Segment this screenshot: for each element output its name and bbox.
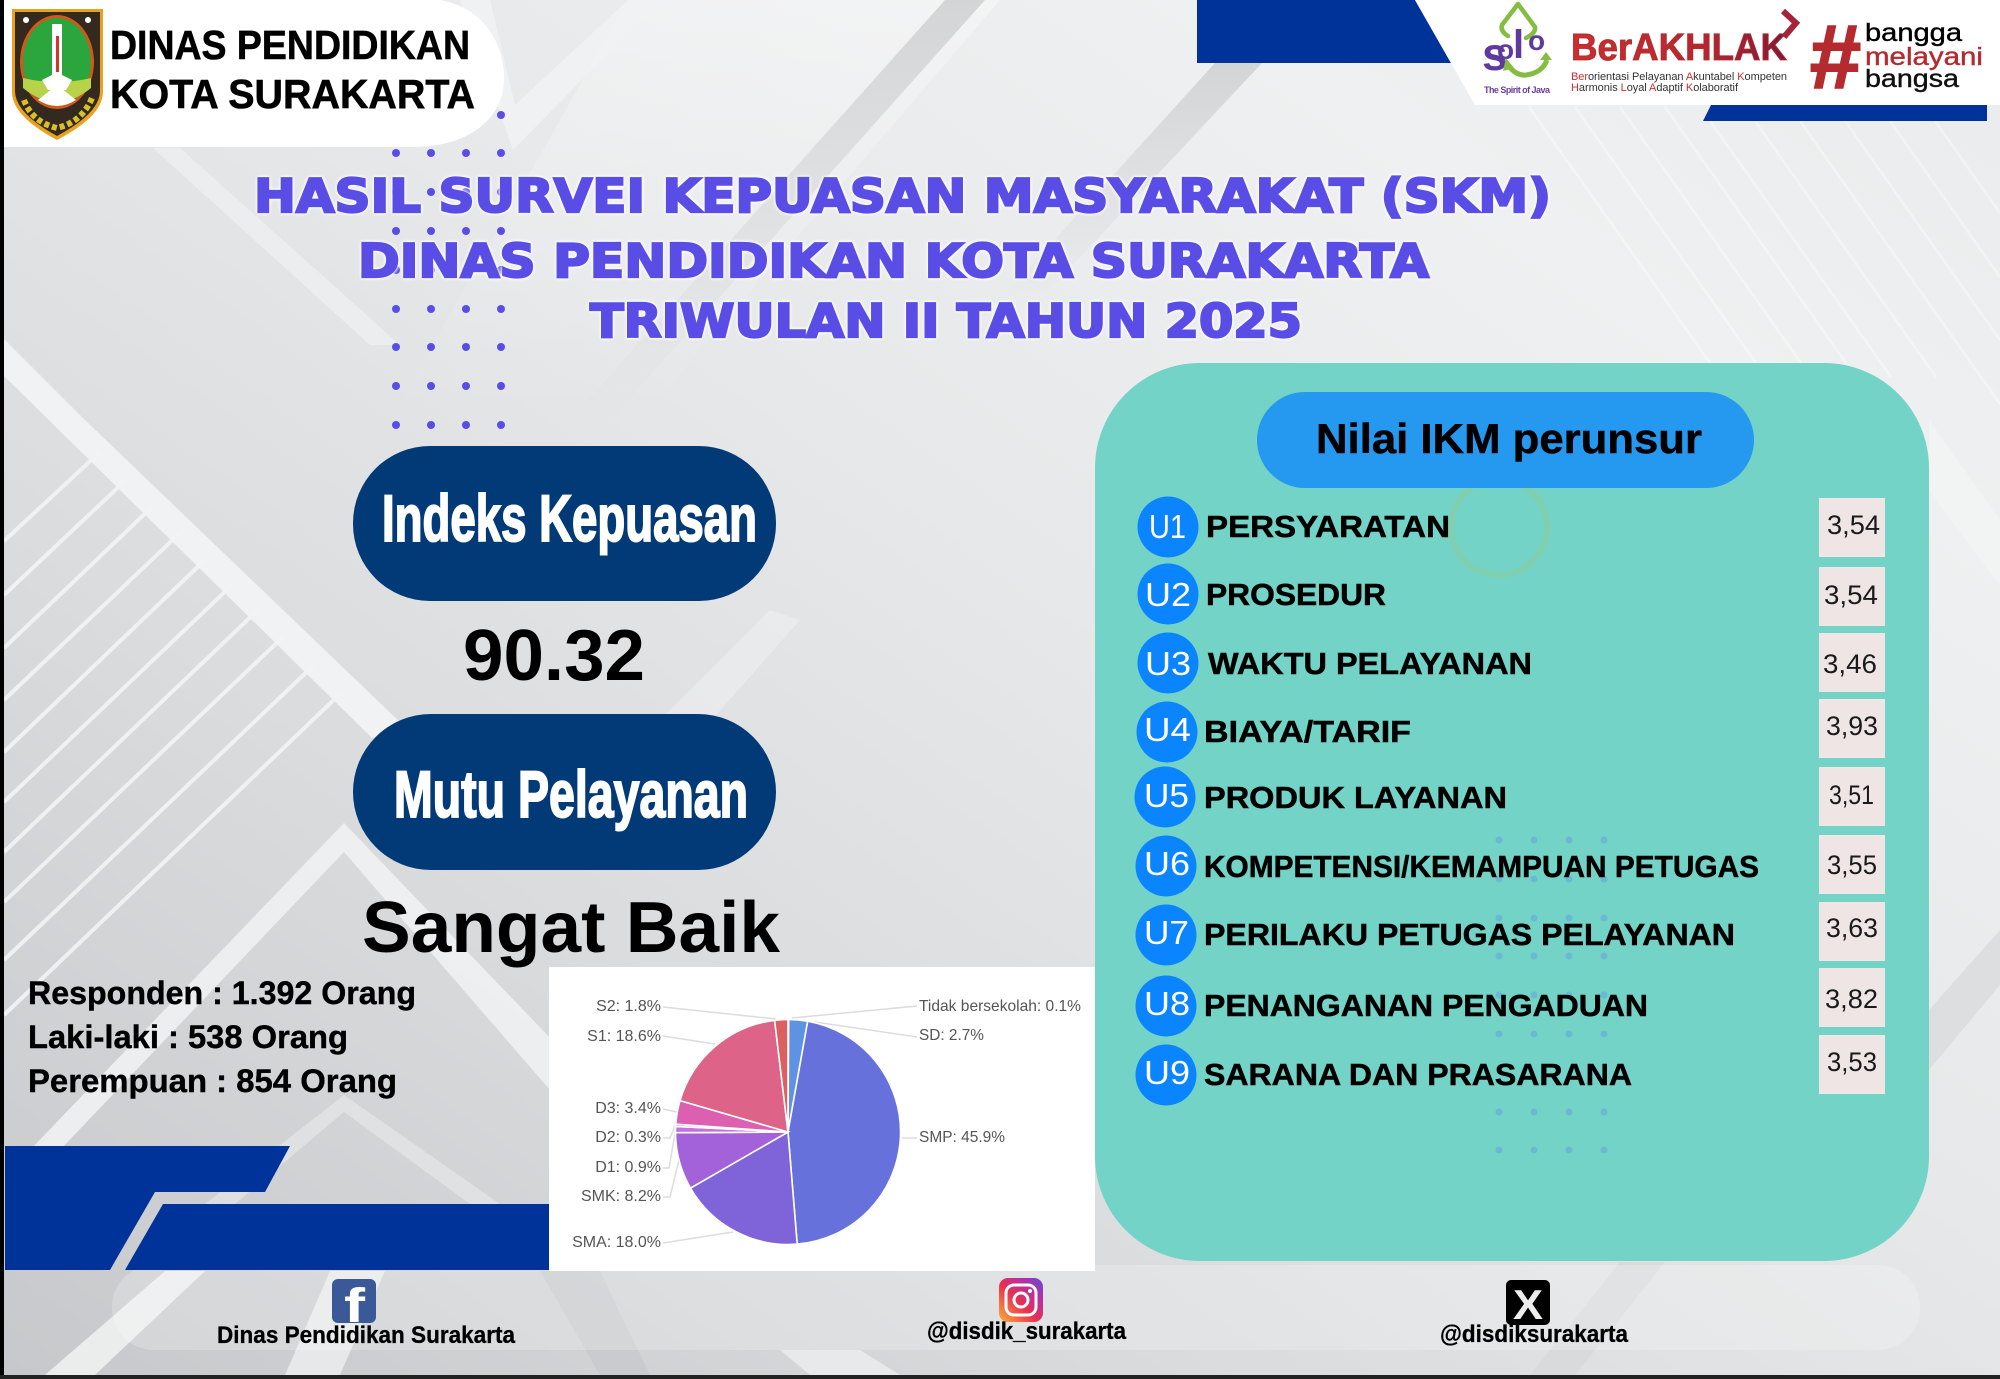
logo: bangga melayani bangsa <box>1810 8 1983 108</box>
row U3: WAKTU PELAYANAN <box>1208 646 1532 681</box>
header: partner logo banner <box>1415 0 2000 108</box>
pie labels: S1: 18.6% <box>587 1028 661 1045</box>
row U8: U8 <box>1144 985 1190 1022</box>
row U3 <box>1138 632 1885 694</box>
row U2 <box>1138 564 1885 626</box>
row U8: PENANGANAN PENGADUAN <box>1204 988 1648 1023</box>
pill: Mutu Pelayanan <box>353 714 776 870</box>
row U3: 3,46 <box>1823 649 1877 679</box>
row U4: U4 <box>1144 711 1191 748</box>
logo: BerAKHLAK: Harmonis Loyal Adaptif Kolaboratif <box>1571 82 1739 94</box>
row U7: PERILAKU PETUGAS PELAYANAN <box>1204 917 1735 952</box>
row U7: 3,63 <box>1826 913 1878 943</box>
row U8 <box>1136 968 1885 1036</box>
logo: Solo Spirit of Java <box>1482 4 1552 95</box>
row U9: 3,53 <box>1827 1047 1877 1077</box>
pie labels: D2: 0.3% <box>595 1129 661 1146</box>
logo: bangga melayani bangsa: # <box>1810 8 1861 108</box>
social: x: @disdiksurakarta <box>1440 1321 1629 1348</box>
row U6: U6 <box>1144 845 1190 882</box>
decorative dot grid: panel <box>1496 836 1608 1154</box>
pie labels: SMK: 8.2% <box>581 1188 661 1205</box>
social: x: X <box>1513 1281 1543 1328</box>
panel: Nilai IKM perunsur <box>1095 363 1929 1261</box>
pill: Indeks Kepuasan <box>353 446 776 601</box>
row U5: PRODUK LAYANAN <box>1204 780 1507 815</box>
row U1: U1 <box>1149 508 1186 545</box>
header: blue accent under banner <box>1703 105 1987 121</box>
logo: bangga melayani bangsa: bangsa <box>1865 65 1959 93</box>
bottom frame line <box>0 1375 2000 1379</box>
logo: BerAKHLAK: BerAKHLAK <box>1571 27 1788 69</box>
logo: bangga melayani bangsa: melayani <box>1865 43 1983 71</box>
social: facebook: f <box>344 1280 366 1333</box>
row U1: PERSYARATAN <box>1206 509 1450 544</box>
row U9: SARANA DAN PRASARANA <box>1204 1057 1632 1092</box>
icon: city crest <box>12 9 103 140</box>
row U7 <box>1136 902 1885 966</box>
row U5 <box>1134 766 1885 828</box>
pie slices <box>675 1019 901 1244</box>
title: DINAS PENDIDIKAN KOTA SURAKARTA <box>358 234 1429 288</box>
title: HASIL SURVEI KEPUASAN MASYARAKAT (SKM) <box>254 169 1551 223</box>
pie labels: Tidak bersekolah: 0.1% <box>919 998 1081 1015</box>
row U4: 3,93 <box>1826 711 1878 741</box>
agency name: DINAS PENDIDIKAN <box>110 22 470 68</box>
logo: Solo Spirit of Java: l <box>1513 23 1524 67</box>
logo: Solo Spirit of Java: s <box>1482 28 1508 80</box>
row U9: U9 <box>1144 1054 1190 1091</box>
pill: Mutu Pelayanan: Mutu Pelayanan <box>394 757 748 831</box>
pie labels: SD: 2.7% <box>919 1027 984 1044</box>
social: facebook: Dinas Pendidikan Surakarta <box>217 1322 516 1349</box>
decorative blue shape upper <box>5 1146 290 1270</box>
row U6: 3,55 <box>1827 850 1877 880</box>
row U6 <box>1136 835 1885 896</box>
row U7: U7 <box>1144 914 1189 951</box>
logo: BerAKHLAK: Berorientasi Pelayanan Akuntabel Kompeten <box>1571 71 1787 83</box>
row U1 <box>1138 496 1885 558</box>
social: x <box>1440 1280 1629 1348</box>
pie labels: SMA: 18.0% <box>572 1234 661 1251</box>
row U4: BIAYA/TARIF <box>1204 714 1411 749</box>
logo: Solo Spirit of Java: The Spirit of Java <box>1484 85 1551 95</box>
row U9 <box>1136 1035 1885 1106</box>
row U8: 3,82 <box>1825 984 1878 1014</box>
left frame line <box>0 0 4 1379</box>
agency name <box>110 22 475 117</box>
row U5: 3,51 <box>1829 780 1874 810</box>
respondent stats: Perempuan : 854 Orang <box>28 1063 397 1099</box>
decorative blue shape lower <box>125 1204 552 1270</box>
respondent stats <box>28 975 416 1099</box>
pie labels: S2: 1.8% <box>596 998 661 1015</box>
row U2: PROSEDUR <box>1206 577 1386 612</box>
social: instagram <box>927 1278 1127 1345</box>
score value: 90.32 <box>463 616 645 696</box>
panel heading pill: Nilai IKM perunsur <box>1316 415 1702 462</box>
pie labels: SMP: 45.9% <box>919 1129 1005 1146</box>
quality rating: Sangat Baik <box>362 888 781 968</box>
agency name: KOTA SURAKARTA <box>110 71 475 117</box>
decorative ring <box>1451 479 1547 575</box>
row U6: KOMPETENSI/KEMAMPUAN PETUGAS <box>1204 849 1759 884</box>
row U2: 3,54 <box>1824 580 1878 610</box>
logo: bangga melayani bangsa: bangga <box>1865 19 1962 47</box>
title <box>254 169 1551 348</box>
panel heading pill <box>1257 392 1754 488</box>
logo: Solo Spirit of Java: o <box>1497 34 1514 65</box>
pill: Indeks Kepuasan: Indeks Kepuasan <box>382 481 757 555</box>
header: agency logo panel <box>4 0 504 147</box>
header: blue accent top <box>1197 0 1451 63</box>
respondent stats: Laki-laki : 538 Orang <box>28 1019 348 1055</box>
logo: Solo Spirit of Java: o <box>1528 25 1545 56</box>
panel: education pie chart <box>549 967 1095 1271</box>
logo: BerAKHLAK <box>1571 11 1796 94</box>
social: instagram: @disdik_surakarta <box>927 1318 1127 1345</box>
pie labels <box>572 998 1081 1251</box>
respondent stats: Responden : 1.392 Orang <box>28 975 416 1011</box>
decorative dot grid: left <box>392 111 505 429</box>
row U5: U5 <box>1144 777 1189 814</box>
row U4 <box>1136 699 1885 762</box>
footer band <box>112 1265 1920 1350</box>
row U2: U2 <box>1145 576 1191 613</box>
row U3: U3 <box>1145 645 1191 682</box>
pie labels: D3: 3.4% <box>595 1100 661 1117</box>
row U1: 3,54 <box>1827 510 1880 540</box>
pie labels: D1: 0.9% <box>595 1159 661 1176</box>
title: TRIWULAN II TAHUN 2025 <box>590 294 1302 348</box>
social: facebook <box>217 1279 516 1349</box>
